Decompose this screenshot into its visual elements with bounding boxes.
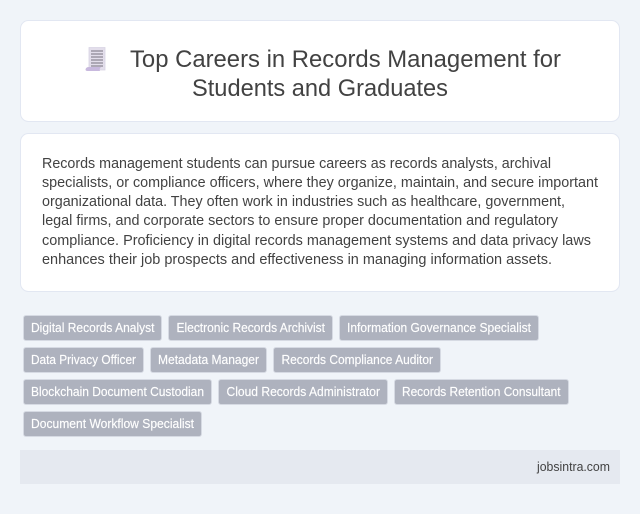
footer bar bbox=[20, 450, 620, 484]
title: Students and Graduates bbox=[192, 75, 448, 102]
tag: Metadata Manager: Metadata Manager bbox=[158, 353, 259, 367]
tag: Information Governance Specialist bbox=[340, 316, 538, 340]
tag: Digital Records Analyst: Digital Records Analyst bbox=[31, 321, 155, 335]
tag: Cloud Records Administrator bbox=[218, 380, 388, 404]
tag: Records Retention Consultant bbox=[394, 380, 568, 404]
tag: Blockchain Document Custodian bbox=[24, 380, 212, 404]
title bbox=[130, 46, 561, 102]
tag: Blockchain Document Custodian: Blockchain Document Custodian bbox=[31, 385, 204, 399]
description text bbox=[42, 156, 598, 268]
tag: Records Retention Consultant: Records Retention Consultant bbox=[402, 385, 561, 399]
tag: Metadata Manager bbox=[150, 348, 266, 372]
title: Top Careers in Records Management for bbox=[130, 46, 561, 73]
header panel bbox=[20, 20, 620, 122]
tag: Information Governance Specialist: Information Governance Specialist bbox=[347, 321, 531, 335]
icon: records document scroll bbox=[86, 48, 105, 71]
career tags bbox=[24, 316, 568, 436]
tag: Data Privacy Officer: Data Privacy Officer bbox=[31, 353, 136, 367]
tag: Records Compliance Auditor bbox=[274, 348, 440, 372]
description text: legal firms, and corporate sectors to ensure proper documentation and regulatory bbox=[42, 213, 559, 229]
tag: Document Workflow Specialist bbox=[24, 412, 202, 436]
tag: Records Compliance Auditor: Records Compliance Auditor bbox=[282, 353, 433, 367]
description text: compliance. Proficiency in digital records management systems and data privacy laws bbox=[42, 233, 591, 249]
description panel bbox=[20, 134, 620, 292]
tag: Cloud Records Administrator: Cloud Records Administrator bbox=[226, 385, 380, 399]
description text: enhances their job prospects and effectiveness in managing information assets. bbox=[42, 252, 552, 268]
tag: Digital Records Analyst bbox=[24, 316, 162, 340]
tag: Document Workflow Specialist: Document Workflow Specialist bbox=[31, 417, 194, 431]
tag: Electronic Records Archivist: Electronic Records Archivist bbox=[176, 321, 325, 335]
tag: Data Privacy Officer bbox=[24, 348, 144, 372]
description text: organizational data. They often work in industries such as healthcare, government, bbox=[42, 194, 565, 210]
description text: specialists, or compliance officers, where they organize, maintain, and secure important bbox=[42, 175, 598, 191]
tag: Electronic Records Archivist bbox=[168, 316, 332, 340]
footer source text: jobsintra.com bbox=[536, 460, 610, 474]
description text: Records management students can pursue careers as records analysts, archival bbox=[42, 156, 551, 172]
